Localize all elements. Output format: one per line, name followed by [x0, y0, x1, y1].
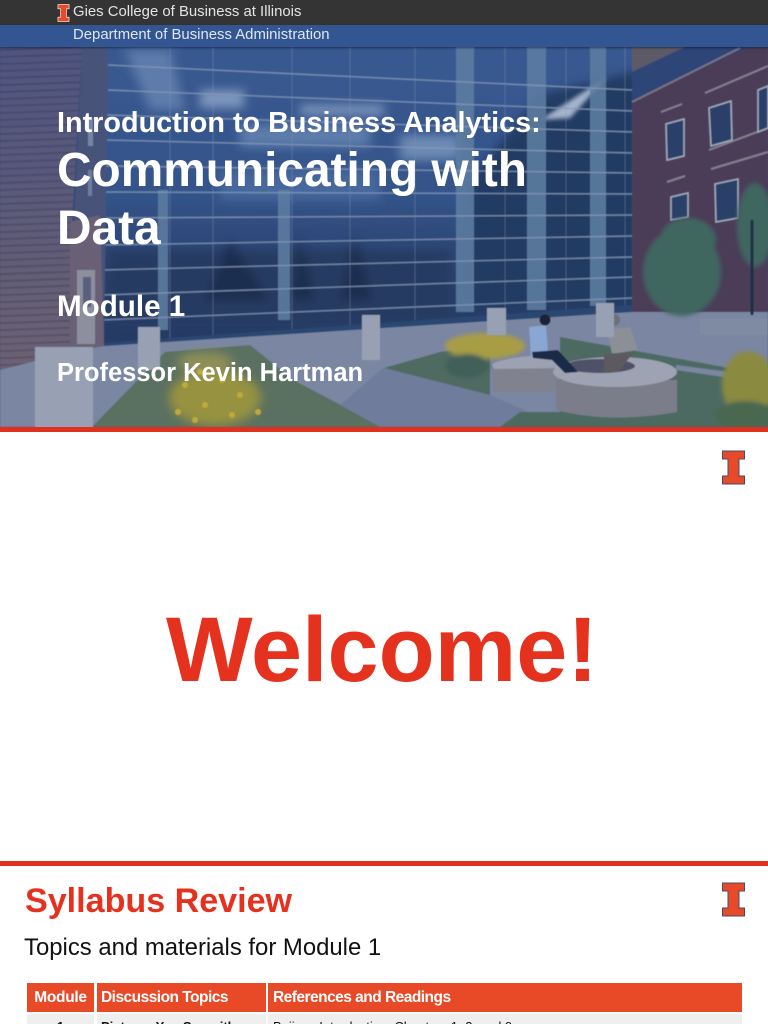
subtitle: Topics and materials for Module 1 [24, 934, 381, 961]
icon: Illinois I logo [722, 882, 745, 916]
header cell: module: Module [34, 989, 87, 1006]
header cell: module [27, 983, 94, 1012]
icon: Illinois I logo [722, 450, 745, 484]
header cell: discussion topics [97, 983, 266, 1012]
course title: Introduction to Business Analytics: [57, 107, 541, 139]
main title: Communicating with [57, 144, 527, 197]
panel: welcome slide [0, 433, 768, 861]
right brick building [632, 47, 768, 320]
left lawn and flower bed [92, 345, 383, 427]
row cell: module number [27, 1014, 94, 1024]
panel: syllabus review slide [0, 861, 768, 1024]
module label: Module 1 [57, 290, 185, 323]
red rule [0, 861, 768, 866]
stone seating circle and people [492, 314, 677, 418]
header cell: discussion topics: Discussion Topics [101, 989, 228, 1006]
trees and flowers [445, 183, 768, 429]
left siding and wall [0, 47, 108, 370]
icon: Illinois I small [58, 4, 70, 22]
header bar: college [0, 0, 768, 25]
syllabus table [27, 983, 742, 1024]
concrete bollards [35, 303, 614, 432]
main title [57, 144, 527, 255]
row cell: readings [268, 1014, 742, 1024]
header cell: references and readings [268, 983, 742, 1012]
row cell: topic [97, 1014, 266, 1024]
welcome heading: Welcome! [166, 599, 598, 701]
slide heading: Syllabus Review [25, 882, 292, 920]
header cell: references and readings: References and Readings [273, 989, 451, 1006]
college name: Gies College of Business at Illinois [73, 4, 301, 20]
professor name: Professor Kevin Hartman [57, 359, 363, 387]
campus building photo [0, 47, 768, 427]
walkway [340, 368, 547, 427]
glass facade [100, 40, 640, 352]
ground and paving [0, 312, 768, 427]
right lawn [384, 345, 490, 395]
panel: title slide [0, 0, 768, 433]
header bar: department [0, 25, 768, 47]
red rule [0, 427, 768, 432]
main title: Data [57, 202, 161, 255]
department name: Department of Business Administration [73, 26, 330, 42]
